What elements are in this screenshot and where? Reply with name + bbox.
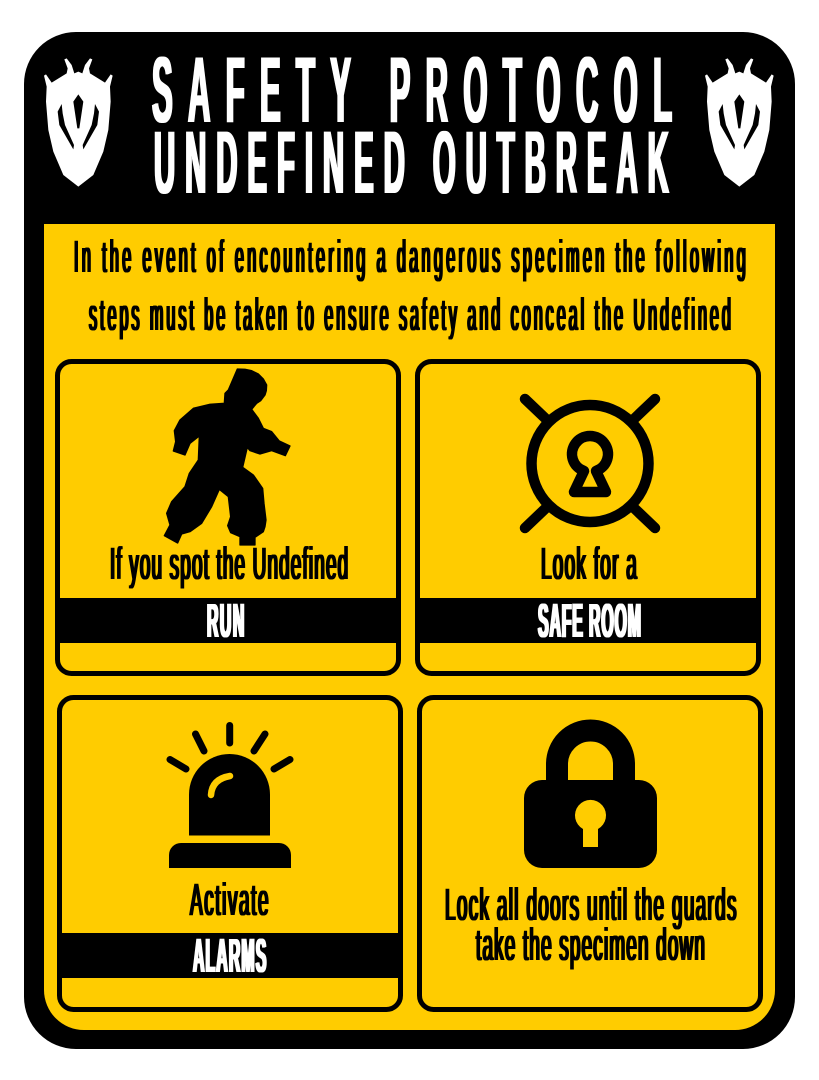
panel text: activate: Activate xyxy=(190,876,269,925)
intro text xyxy=(74,232,746,341)
icon: left creature emblem xyxy=(44,58,113,187)
icon: running figure silhouette xyxy=(164,369,290,545)
intro text: steps must be taken to ensure safety and conceal the Undefined xyxy=(89,290,731,341)
panel: alarms xyxy=(59,698,401,1010)
bar label: alarms: ALARMS xyxy=(193,929,266,983)
title: SAFETY PROTOCOL xyxy=(152,37,672,142)
black bar: run xyxy=(57,598,399,643)
panel text: if you spot the undefined: If you spot the Undefined xyxy=(110,540,348,589)
black bar: safe room xyxy=(417,598,759,643)
panel text: lock all doors: Lock all doors until the guards xyxy=(445,881,736,930)
black bar: alarms xyxy=(59,933,401,978)
title: UNDEFINED OUTBREAK xyxy=(154,114,669,213)
icon: right creature emblem xyxy=(705,58,774,187)
panel: run xyxy=(57,362,399,674)
icon: alarm beacon xyxy=(169,726,291,868)
bar label: safe room: SAFE ROOM xyxy=(538,594,641,648)
icon: padlock xyxy=(524,730,657,868)
panel text: lock all doors xyxy=(445,881,736,970)
title xyxy=(152,37,672,213)
panel: safe room xyxy=(417,362,759,674)
yellow sign body xyxy=(44,224,775,1030)
bar label: run: RUN xyxy=(207,594,244,648)
panel text: lock all doors: take the specimen down xyxy=(476,921,705,970)
panel: lock doors xyxy=(420,698,760,1010)
panel text: look for a: Look for a xyxy=(541,540,637,589)
icon: safe with keyhole xyxy=(525,399,655,528)
intro text: In the event of encountering a dangerous specimen the following xyxy=(74,232,746,283)
